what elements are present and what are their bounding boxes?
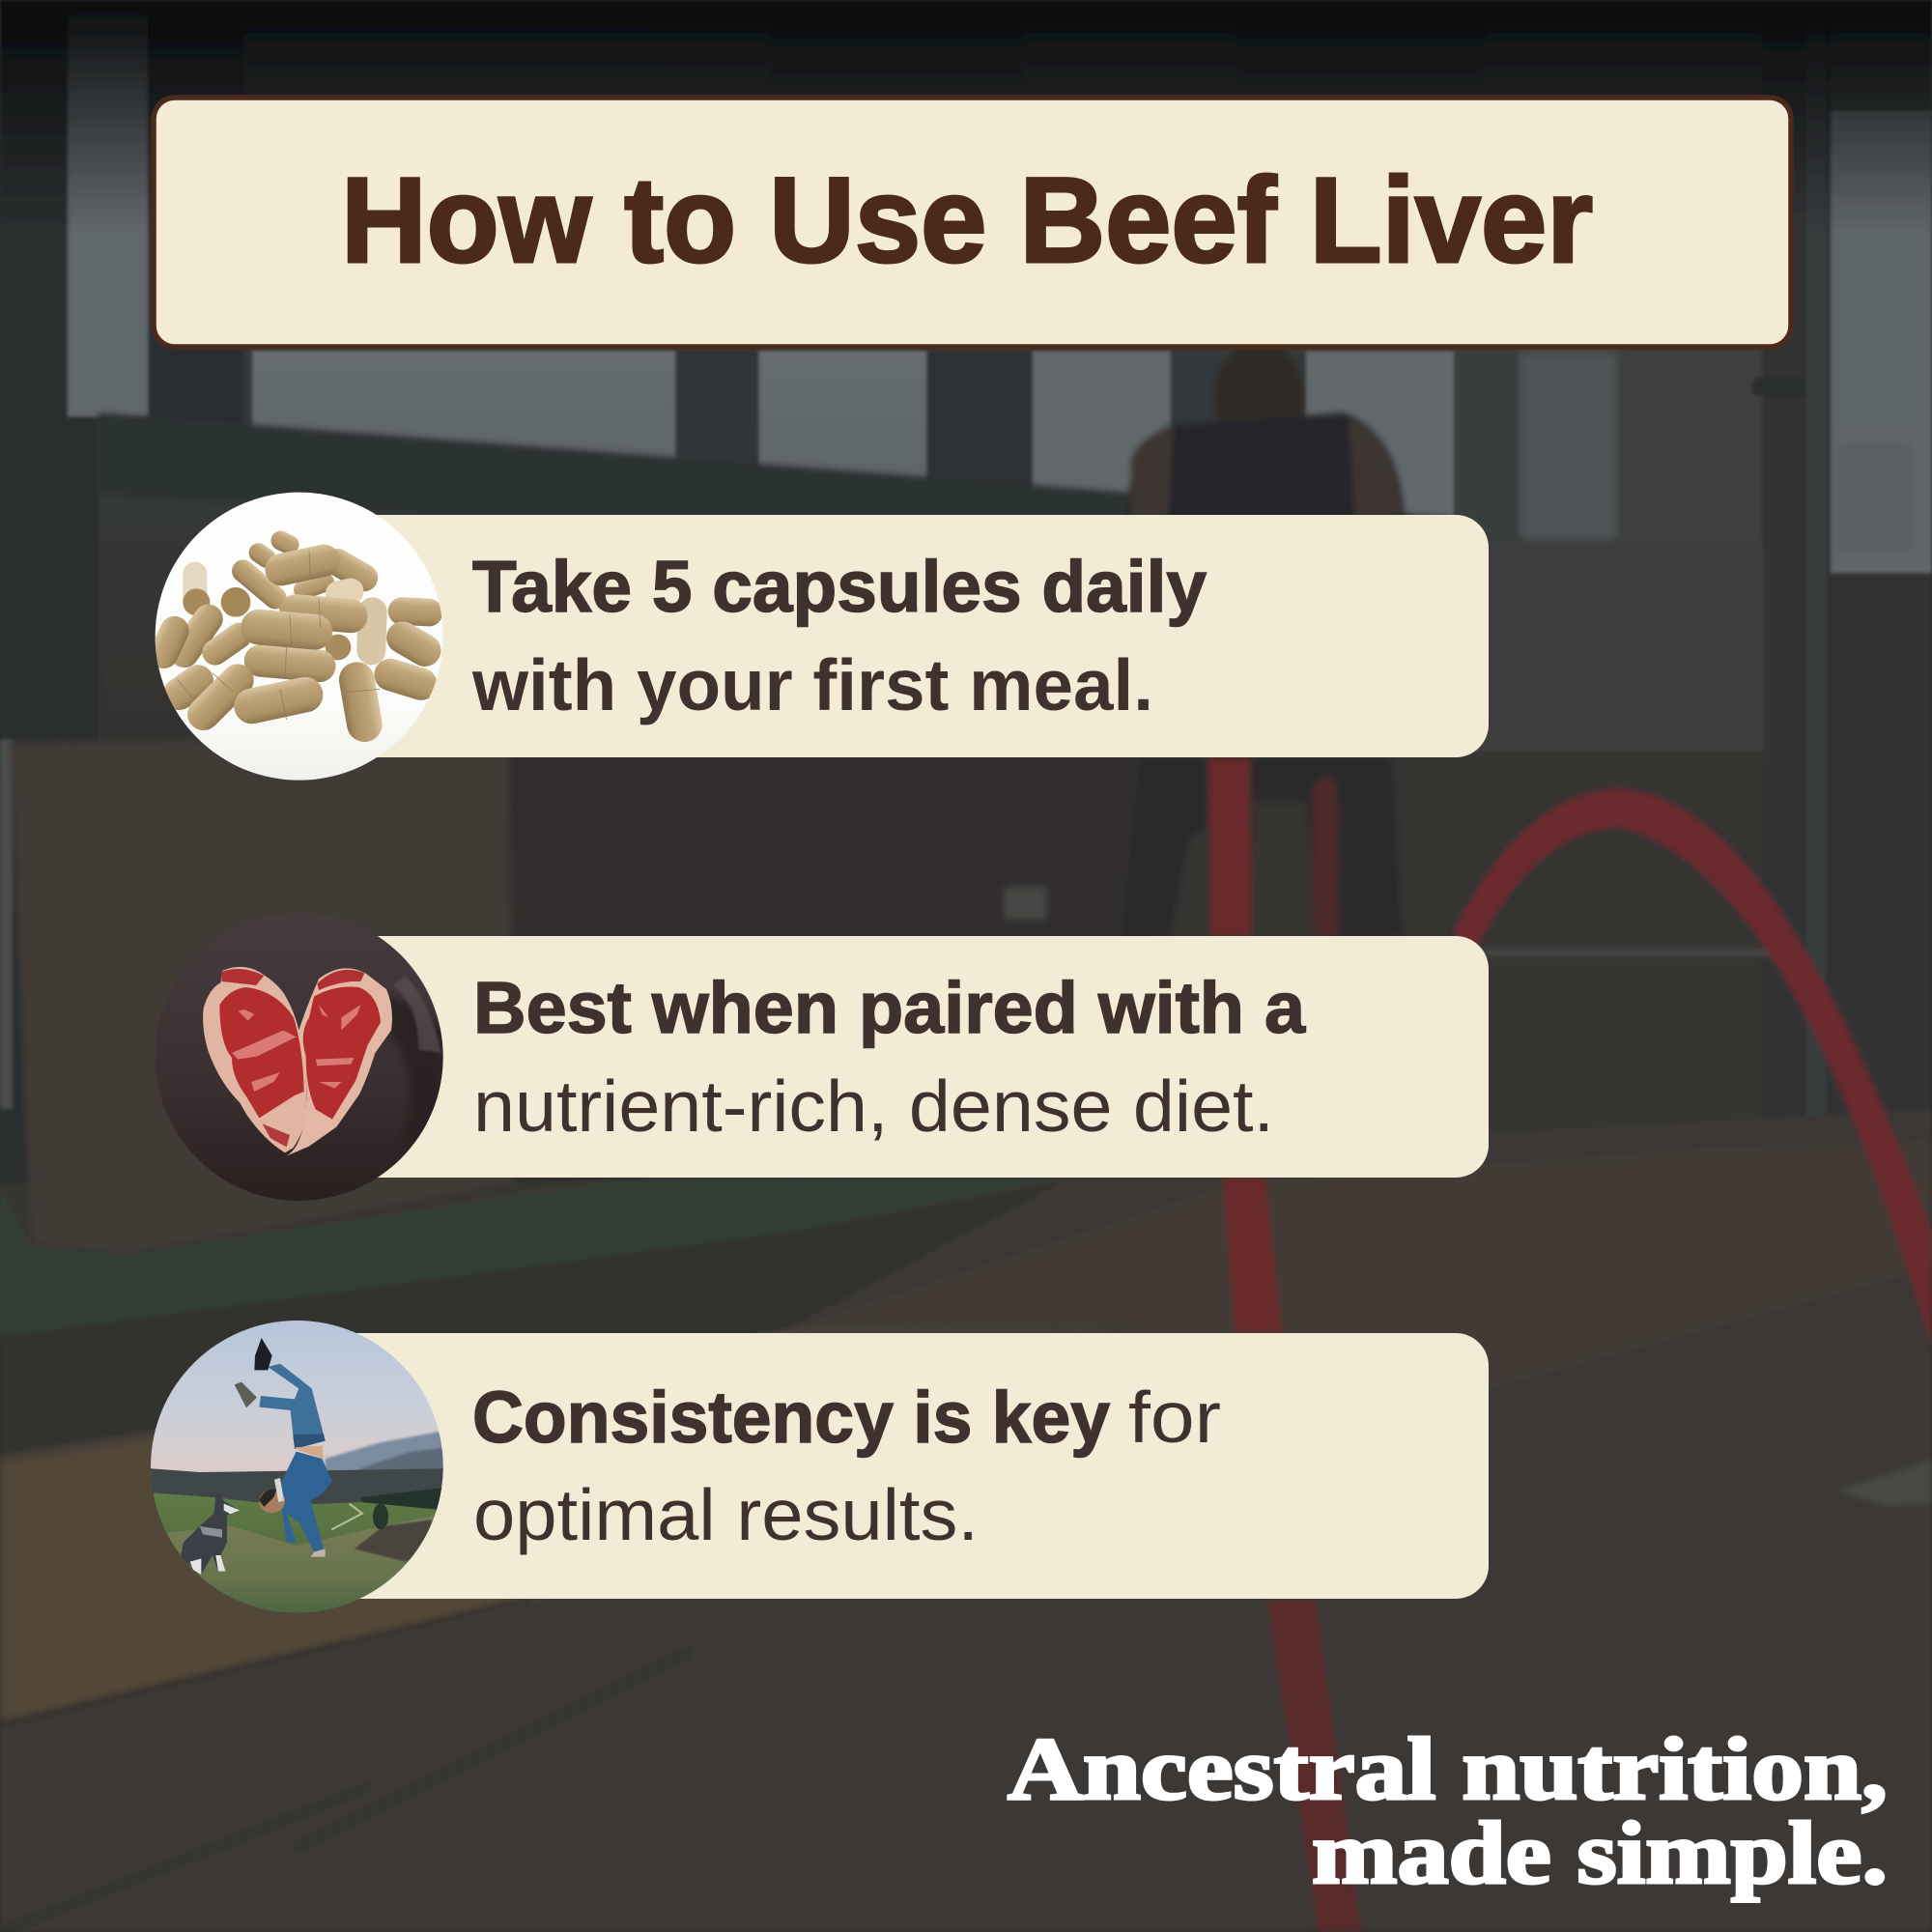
icon: capsules photo [155, 493, 443, 781]
step 2 heading: Best when paired with a [473, 967, 1306, 1048]
step 3 heading suffix: for [1128, 1377, 1221, 1458]
title text: How to Use Beef Liver [341, 154, 1593, 288]
husky dog [181, 1492, 240, 1575]
icon: handstand with dog photo [151, 1321, 443, 1613]
plyo box [10, 737, 515, 1254]
icon: heart-shaped steak photo [156, 913, 443, 1201]
upper wall and window band [0, 0, 1932, 1182]
step 3 text card [309, 1333, 1489, 1599]
athlete silhouette [1122, 340, 1405, 936]
step 1 text card [309, 515, 1489, 757]
top vignette [0, 0, 1932, 234]
step 3 heading: Consistency is key [472, 1377, 1110, 1458]
step 2 detail: nutrient-rich, dense diet. [473, 1065, 1274, 1147]
red battle ropes [1208, 757, 1932, 1932]
floor [0, 1109, 1932, 1932]
left steak [203, 967, 306, 1152]
tagline line 2: made simple. [1312, 1804, 1888, 1902]
athlete doing a handstand [235, 1338, 332, 1557]
step 2 text card [309, 936, 1489, 1178]
tagline line 1: Ancestral nutrition, [1008, 1719, 1888, 1818]
tagline [1008, 1719, 1888, 1902]
step 1 heading: Take 5 capsules daily [472, 546, 1207, 627]
step 1 detail: with your first meal. [471, 644, 1153, 725]
right steak [287, 968, 392, 1156]
lower wall with radiator [505, 752, 1775, 1182]
title panel [154, 98, 1791, 347]
panel: step 2 diet [156, 913, 1489, 1201]
step 3 detail: optimal results. [473, 1474, 979, 1555]
panel: step 1 capsules [155, 493, 1489, 781]
panel: step 3 consistency [151, 1321, 1489, 1613]
